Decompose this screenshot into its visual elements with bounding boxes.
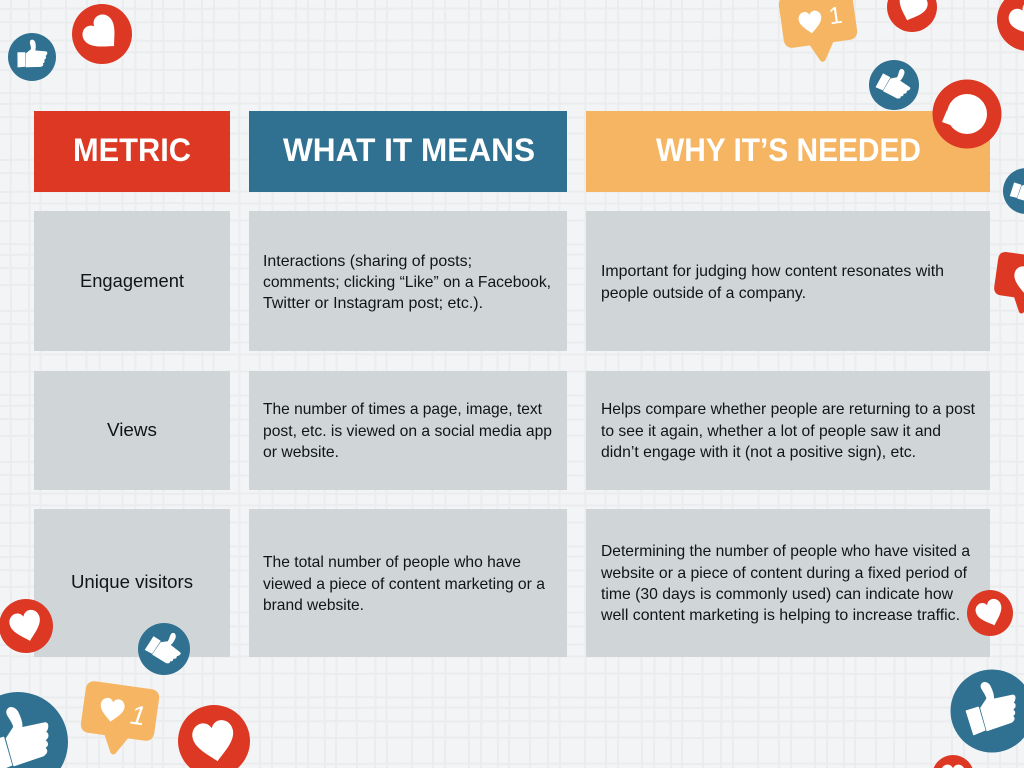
icon: heart top right <box>887 0 937 32</box>
icon: thumb right edge <box>1003 168 1024 214</box>
icon: heart bottom <box>178 705 250 768</box>
icon: like badge top: 1 <box>827 2 844 30</box>
icon: thumb upper right <box>869 60 919 110</box>
header: metric <box>34 111 230 192</box>
header: why it's needed <box>586 111 990 192</box>
icon: like badge bottom <box>81 683 157 756</box>
icon: heart lower right <box>967 590 1013 636</box>
row: unique visitors need: time (30 days is commonly used) can indicate how <box>601 586 953 603</box>
icon: thumb lower left <box>138 623 190 675</box>
header: what it means <box>249 111 567 192</box>
row: unique visitors need <box>586 509 990 657</box>
row: views meaning <box>249 371 567 490</box>
row: engagement meaning <box>249 211 567 351</box>
row: views meaning: The number of times a page, image, text <box>263 401 543 418</box>
header: metric: METRIC <box>73 132 191 168</box>
row: views need: to see it again, whether a lot of people saw it and <box>601 423 941 440</box>
row: views need: Helps compare whether people are returning to a post <box>601 401 976 418</box>
row: views meaning: post, etc. is viewed on a social media app <box>263 423 552 440</box>
icon: speech bubble <box>932 80 1002 148</box>
row: views meaning: or website. <box>263 444 339 461</box>
row: unique visitors need: website or a piece of content during a fixed period of <box>600 565 968 582</box>
icon: like badge bottom: 1 <box>129 700 148 731</box>
row: engagement need: Important for judging how content resonates with <box>601 263 944 280</box>
row: views need: didn’t engage with it (not a positive sign), etc. <box>601 444 916 461</box>
row: unique visitors meaning: The total number of people who have <box>263 554 521 571</box>
row: unique visitors meaning: viewed a piece of content marketing or a <box>263 576 545 593</box>
row: unique visitors metric: Unique visitors <box>71 572 193 592</box>
icon: thumb top left <box>8 33 56 81</box>
row: engagement meaning: comments; clicking “Like” on a Facebook, <box>263 274 551 291</box>
row: engagement need: people outside of a company. <box>601 285 806 302</box>
icon: like badge top <box>781 0 857 63</box>
row: unique visitors meaning <box>249 509 567 657</box>
row: unique visitors metric <box>34 509 230 657</box>
icon: red badge right edge <box>994 254 1024 315</box>
row: unique visitors need: well content marketing is helping to increase traffic. <box>600 607 960 624</box>
row: views metric: Views <box>107 420 157 440</box>
row: views metric <box>34 371 230 490</box>
row: unique visitors meaning: brand website. <box>263 597 364 614</box>
icon: heart top left <box>72 4 132 64</box>
icon: heart far right <box>997 0 1024 51</box>
row: engagement meaning: Twitter or Instagram post; etc.). <box>263 295 483 312</box>
icon: big thumb bottom right <box>950 670 1024 752</box>
row: engagement metric: Engagement <box>80 271 184 291</box>
row: unique visitors need: Determining the number of people who have visited a <box>601 543 970 560</box>
header: what it means: WHAT IT MEANS <box>283 132 535 168</box>
icon: big thumb bottom left <box>0 692 68 768</box>
icon: heart lower left <box>0 599 53 653</box>
header: why it's needed: WHY IT’S NEEDED <box>656 132 921 168</box>
icon: heart bottom right <box>932 755 974 768</box>
row: engagement need <box>586 211 990 351</box>
row: engagement metric <box>34 211 230 351</box>
row: views need <box>586 371 990 490</box>
row: engagement meaning: Interactions (sharing of posts; <box>263 253 472 270</box>
